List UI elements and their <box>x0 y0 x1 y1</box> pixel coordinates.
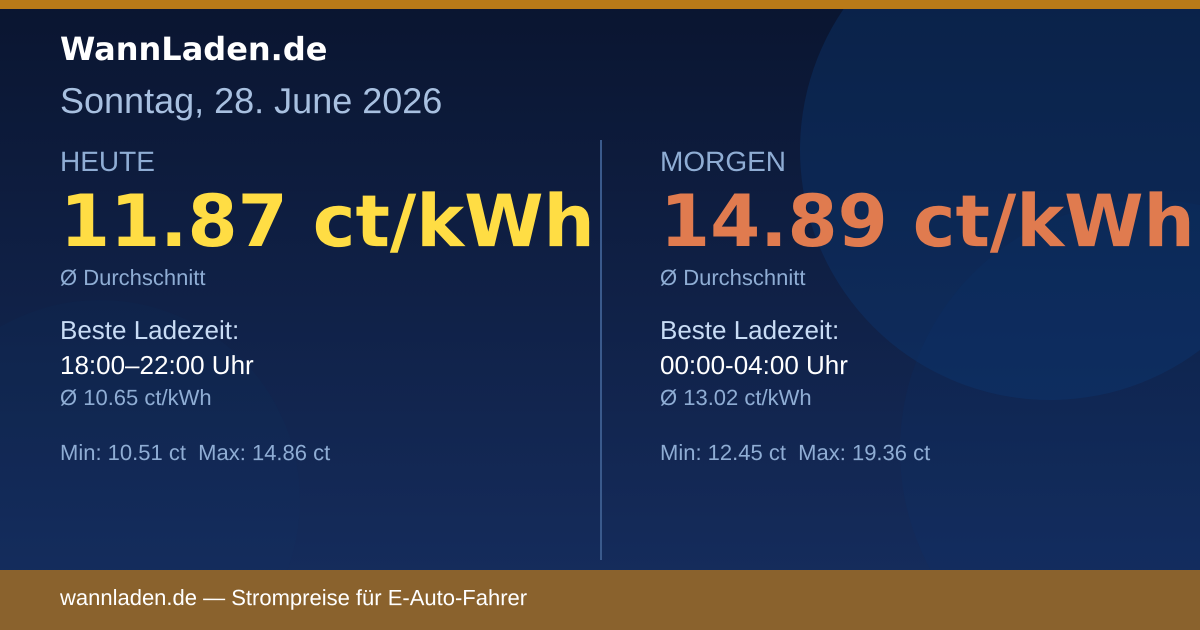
tomorrow average caption: Ø Durchschnitt <box>660 265 806 290</box>
date: Sonntag, 28. June 2026 <box>60 80 442 121</box>
tomorrow label: MORGEN <box>660 146 786 177</box>
today average price: 11.87 ct/kWh <box>60 179 595 263</box>
today best charging average: Ø 10.65 ct/kWh <box>60 385 212 410</box>
tomorrow best charging time: 00:00-04:00 Uhr <box>660 350 848 380</box>
today label: HEUTE <box>60 146 155 177</box>
tomorrow best charging average: Ø 13.02 ct/kWh <box>660 385 812 410</box>
footer bar <box>0 570 1200 630</box>
decorative circle: top right <box>800 0 1200 400</box>
title: WannLaden.de <box>60 30 327 68</box>
today average caption: Ø Durchschnitt <box>60 265 206 290</box>
tomorrow min and max: Min: 12.45 ct Max: 19.36 ct <box>660 440 930 465</box>
panel: today <box>60 146 595 465</box>
today best charging time: 18:00–22:00 Uhr <box>60 350 254 380</box>
column divider <box>600 140 602 560</box>
tomorrow average price: 14.89 ct/kWh <box>660 179 1195 263</box>
today best charging label: Beste Ladezeit: <box>60 315 239 345</box>
tomorrow best charging label: Beste Ladezeit: <box>660 315 839 345</box>
decorative circle: lower left <box>0 300 300 570</box>
decorative circle: lower right <box>900 200 1200 570</box>
top accent bar <box>0 0 1200 9</box>
panel: tomorrow <box>660 146 1195 465</box>
today min and max: Min: 10.51 ct Max: 14.86 ct <box>60 440 330 465</box>
footer text: wannladen.de — Strompreise für E-Auto-Fahrer <box>59 585 527 610</box>
